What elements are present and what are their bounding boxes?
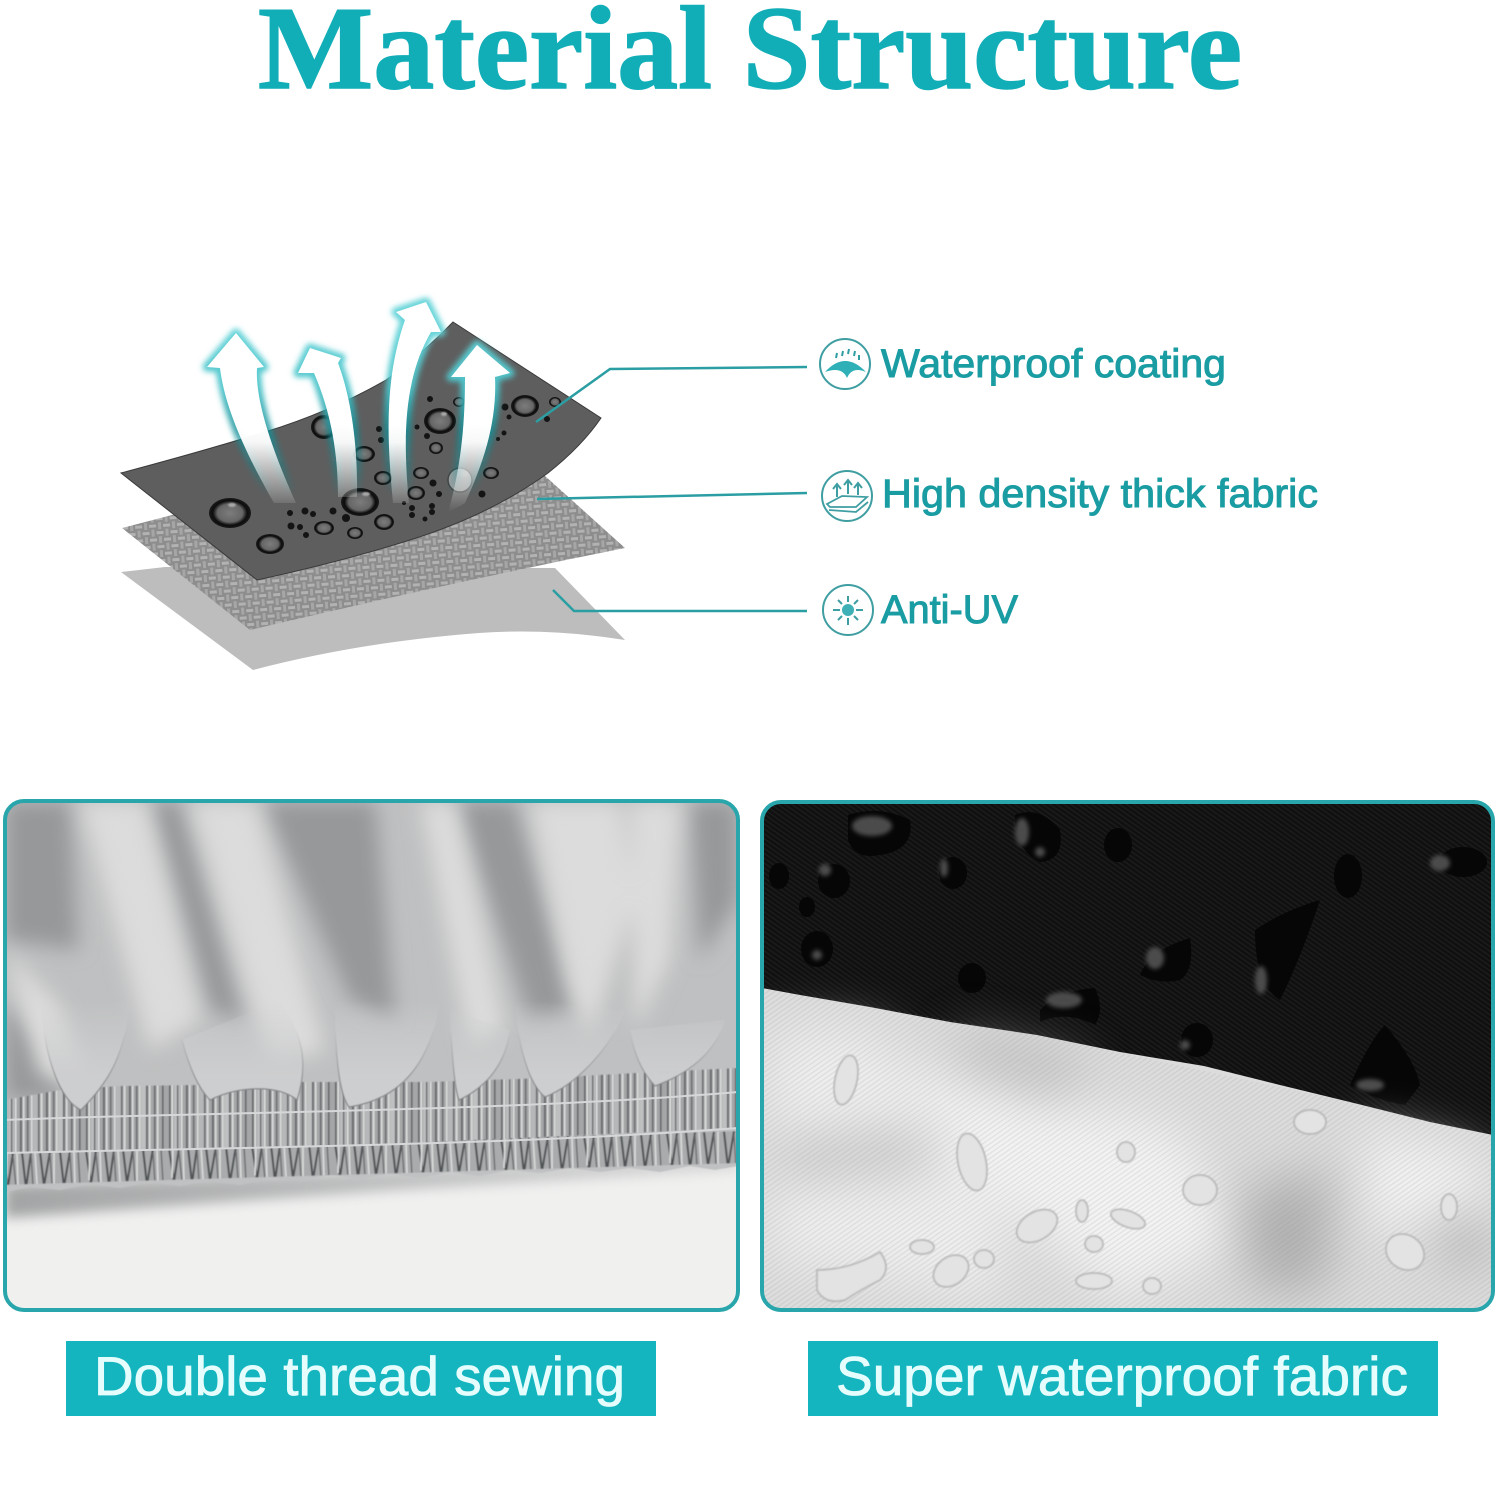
arrow glow [207, 302, 510, 513]
soft dark folds [5, 801, 738, 1100]
icon: high density layers [822, 471, 872, 521]
panel border [762, 802, 1493, 1310]
arrows: breathable vapour [207, 302, 510, 513]
droplet highlights [228, 412, 468, 507]
bead highlights [812, 816, 1450, 1091]
callout line: anti-UV [553, 590, 807, 611]
soft light folds [5, 801, 680, 1090]
caption bar: super waterproof fabric: Super waterproof fabric [836, 1345, 1408, 1407]
lining twill texture [762, 988, 1493, 1310]
water beads on lining [817, 1053, 1457, 1301]
stitching line lower [5, 1128, 738, 1153]
label: anti-UV: Anti-UV [881, 588, 1018, 632]
tiny droplets [287, 396, 550, 538]
layer: bottom anti-UV sheet [121, 567, 625, 670]
callout line: waterproof coating [536, 367, 807, 422]
gathered fabric lobes [44, 1021, 712, 1110]
icon: rain on waterproof canopy [820, 339, 870, 389]
layer: middle woven fabric sheet [122, 475, 625, 630]
panel: silver elastic hem photo [5, 801, 738, 1310]
elastic ruffle band, lower row [5, 1128, 738, 1192]
callout line: high density fabric [537, 493, 807, 499]
lining shading [770, 1030, 1490, 1300]
diagram: three material layers [121, 302, 625, 670]
caption bar: double thread sewing: Double thread sewing [94, 1345, 625, 1407]
layer: top waterproof sheet with droplets [121, 322, 601, 580]
water beads on black [769, 811, 1487, 1105]
silver fabric body [7, 803, 736, 1100]
elastic ruffle band, upper row [5, 1068, 738, 1158]
arrow fills [207, 302, 510, 513]
icon: sun [823, 585, 873, 635]
panel border [5, 801, 738, 1310]
label: waterproof coating: Waterproof coating [881, 342, 1226, 386]
panel: black and silver waterproof fabric photo [762, 802, 1493, 1310]
droplets [209, 395, 561, 554]
label: high density thick fabric: High density thick fabric [882, 472, 1318, 516]
light droplet [448, 468, 472, 492]
silver lining [762, 988, 1493, 1310]
stitching line upper [5, 1092, 738, 1120]
floor shadow under the hem [5, 1155, 738, 1218]
